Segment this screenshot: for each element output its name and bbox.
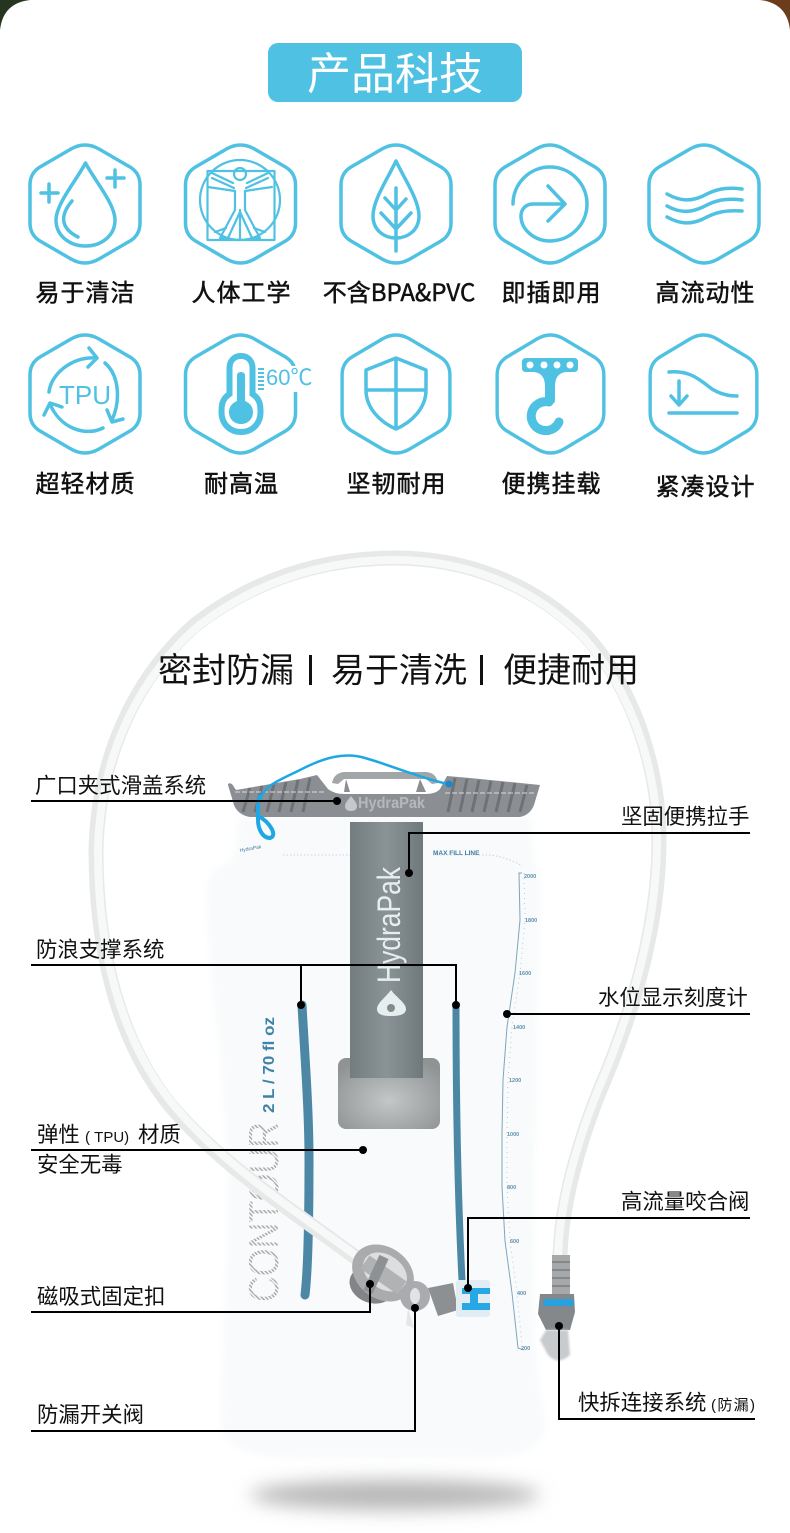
feature: portable hook: 便携挂载 [502, 464, 602, 499]
feature: ergonomic: 人体工学 [192, 273, 292, 308]
callout: quick connect system: 快拆连接系统 [578, 1391, 706, 1415]
callout: TPU material: 材质 [138, 1123, 181, 1147]
callout: water level scale [503, 986, 750, 1018]
feature: high flow: 高流动性 [656, 273, 756, 308]
callout: wide-mouth slide closure [31, 774, 341, 805]
heading: 密封防漏 [158, 652, 294, 690]
feature: durable: 坚韧耐用 [346, 464, 446, 499]
grip patch [338, 1058, 440, 1129]
heading: 易于清洗 [331, 652, 467, 690]
volume scale: 400 [517, 1291, 526, 1297]
callout: high-flow bite valve [464, 1190, 750, 1292]
callout: magnetic clip: 磁吸式固定扣 [37, 1285, 165, 1309]
feature: durable [342, 335, 450, 499]
feature: heat resistant [186, 335, 312, 499]
callout: carry handle [405, 805, 750, 877]
hydration bladder body: HydraPak [239, 844, 262, 854]
capacity and brand print: CONTOUR [240, 1122, 287, 1302]
callout: high-flow bite valve: 高流量咬合阀 [621, 1190, 749, 1214]
feature: easy to clean: 易于清洁 [36, 273, 136, 308]
title badge [268, 43, 522, 102]
volume scale: 200 [521, 1346, 530, 1352]
feature: portable hook [497, 335, 604, 499]
callout: TPU material [31, 1123, 367, 1177]
callout: quick connect system [555, 1322, 755, 1419]
feature: lightweight material [30, 335, 140, 499]
capacity and brand print: 2 L / 70 fl oz [261, 1017, 278, 1113]
heading: 便捷耐用 [503, 652, 639, 690]
feature: heat resistant: 耐高温 [204, 464, 279, 499]
bite valve [456, 1280, 490, 1317]
feature: ergonomic [186, 145, 296, 308]
hydration bladder body [207, 818, 544, 1458]
blue cord [258, 755, 452, 838]
callout: quick connect system: (防漏) [711, 1397, 755, 1414]
volume scale: 2000 [524, 874, 536, 880]
feature: high flow [649, 145, 759, 308]
volume scale: 1400 [513, 1025, 525, 1031]
photo background corner: top left [0, 0, 30, 30]
title badge: 产品科技 [307, 50, 483, 99]
callout: anti-slosh baffle [31, 938, 460, 1009]
photo background corner: top right [760, 0, 790, 30]
volume scale [502, 873, 537, 1352]
feature: easy to clean [30, 145, 140, 308]
volume scale: 1600 [519, 971, 531, 977]
feature: BPA and PVC free: 不含BPA&PVC [323, 273, 475, 308]
callout: carry handle: 坚固便携拉手 [621, 805, 749, 829]
feature: plug and play [495, 145, 605, 308]
feature: plug and play: 即插即用 [502, 273, 602, 308]
callout: water level scale: 水位显示刻度计 [598, 986, 748, 1010]
quick connect [538, 1255, 575, 1360]
heading [158, 652, 639, 690]
top slider closure [228, 772, 540, 817]
shutoff valve [400, 1281, 458, 1328]
feature: heat resistant: 60℃ [266, 365, 312, 390]
feature: lightweight material: TPU [59, 380, 111, 410]
volume scale: 600 [510, 1239, 519, 1245]
feature: compact design [650, 335, 757, 502]
feature: lightweight material: 超轻材质 [36, 464, 136, 499]
callout: anti-slosh baffle: 防浪支撑系统 [36, 938, 164, 962]
ground shadow [250, 1480, 540, 1510]
callout: TPU material: 安全无毒 [37, 1153, 123, 1177]
volume scale: 800 [507, 1185, 516, 1191]
callout: shutoff valve [31, 1304, 419, 1431]
hydration bladder body: MAX FILL LINE [433, 850, 480, 857]
carry strap [350, 822, 423, 1078]
feature: BPA and PVC free [323, 145, 475, 308]
callout: TPU material: ( TPU) [85, 1129, 129, 1146]
callout: shutoff valve: 防漏开关阀 [37, 1403, 144, 1427]
volume scale: 1800 [525, 918, 537, 924]
top slider closure: HydraPak [358, 795, 425, 812]
callout: magnetic clip [31, 1280, 374, 1312]
callout: wide-mouth slide closure: 广口夹式滑盖系统 [35, 774, 206, 798]
volume scale: 1000 [507, 1132, 519, 1138]
drinking tube [96, 558, 659, 1268]
feature: compact design: 紧凑设计 [656, 467, 756, 502]
magnetic clip [341, 1233, 425, 1313]
carry strap: HydraPak [371, 866, 407, 983]
baffle rods [302, 1005, 462, 1295]
volume scale: 1200 [509, 1078, 521, 1084]
callout: TPU material: 弹性 [37, 1123, 80, 1147]
